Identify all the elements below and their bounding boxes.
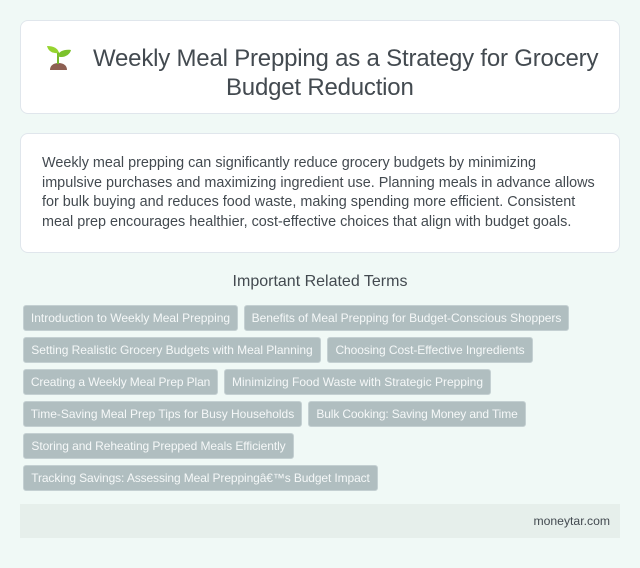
heading: important related terms: Important Related Terms	[233, 273, 407, 290]
tag	[327, 337, 533, 363]
tag: Introduction to Weekly Meal Prepping	[31, 311, 230, 325]
tag: Tracking Savings: Assessing Meal Preppingâ€™s Budget Impact	[31, 471, 370, 485]
tag: Creating a Weekly Meal Prep Plan	[31, 375, 210, 389]
heading: title line 1: Weekly Meal Prepping as a Strategy for Grocery	[93, 45, 598, 72]
tag	[23, 401, 302, 427]
text block: summary: Weekly meal prepping can significantly reduce grocery budgets by minimizing	[42, 155, 536, 171]
footer bar	[20, 504, 620, 538]
tag	[23, 369, 218, 395]
tag: Benefits of Meal Prepping for Budget-Conscious Shoppers	[252, 311, 561, 325]
tag	[23, 305, 238, 331]
tag: Setting Realistic Grocery Budgets with Meal Planning	[31, 343, 313, 357]
tag: Minimizing Food Waste with Strategic Prepping	[232, 375, 483, 389]
heading: title line 2: Budget Reduction	[226, 74, 414, 101]
text block: summary: impulsive purchases and maximizing ingredient use. Planning meals in advance allows	[42, 174, 595, 190]
text block: summary: meal prep encourages healthier, cost-effective choices that align with budget goals.	[42, 214, 571, 230]
tag	[23, 433, 294, 459]
tag: Time-Saving Meal Prep Tips for Busy Households	[31, 407, 294, 421]
tag	[23, 337, 321, 363]
tag: Bulk Cooking: Saving Money and Time	[316, 407, 518, 421]
tag	[244, 305, 569, 331]
tag	[308, 401, 526, 427]
panel: related term tags	[23, 305, 569, 491]
footer text: moneytar.com	[533, 514, 610, 528]
tag: Storing and Reheating Prepped Meals Efficiently	[31, 439, 286, 453]
text block: summary	[42, 155, 595, 230]
tag	[224, 369, 491, 395]
text block: summary: for bulk buying and reduces food waste, making spending more efficient. Consistent	[42, 194, 575, 210]
tag	[23, 465, 378, 491]
tag: Choosing Cost-Effective Ingredients	[335, 343, 525, 357]
icon: seedling	[47, 46, 71, 70]
panel: title card	[20, 20, 620, 114]
panel: summary card	[20, 133, 620, 253]
